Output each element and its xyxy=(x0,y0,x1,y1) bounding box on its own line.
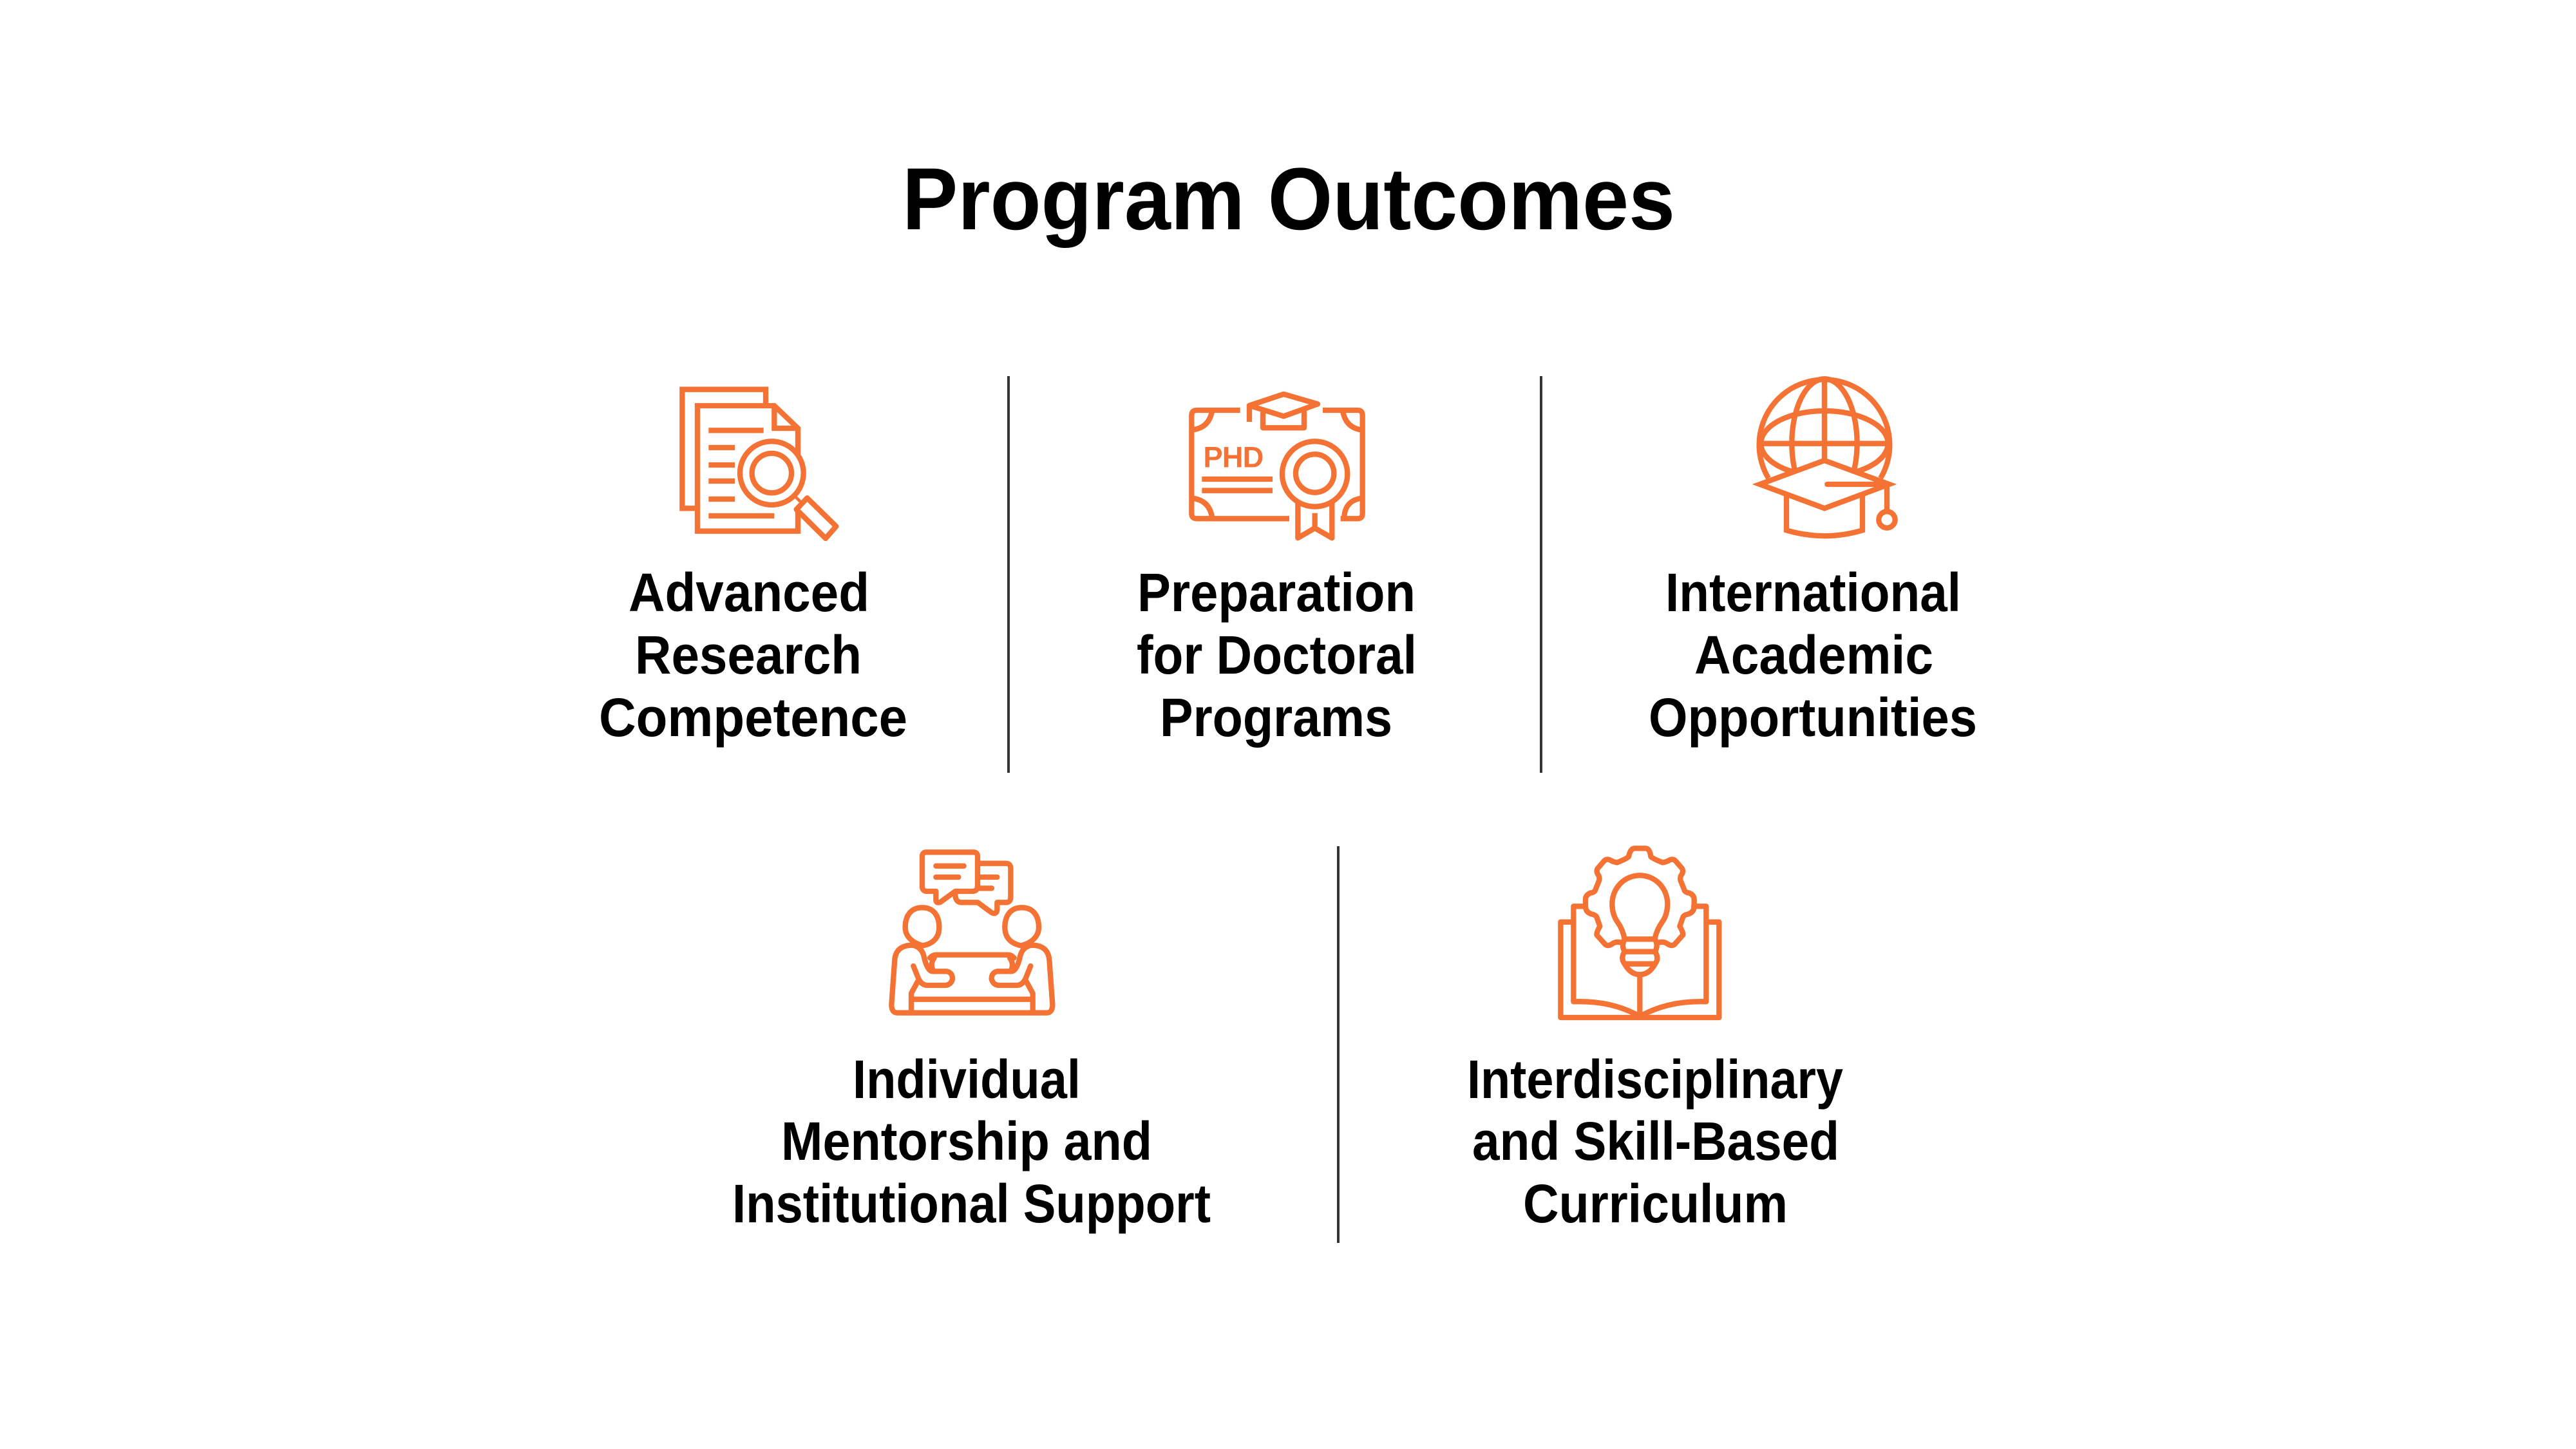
divider: row 2 xyxy=(1337,846,1340,1243)
label: Interdisciplinary and Skill-Based Curriculum: Interdisciplinary xyxy=(1467,1049,1843,1110)
icon: two people talking at a table xyxy=(891,852,1052,1013)
label: International Academic Opportunities: Academic xyxy=(1694,625,1933,685)
icon: globe with graduation cap xyxy=(1759,379,1895,536)
icon: documents with magnifying glass xyxy=(682,390,836,538)
panel: Preparation for Doctoral Programs xyxy=(1137,394,1417,748)
label: Interdisciplinary and Skill-Based Curriculum: and Skill-Based xyxy=(1472,1111,1839,1171)
label: International Academic Opportunities: Opportunities xyxy=(1649,687,1977,748)
label: Advanced Research Competence: Advanced xyxy=(629,562,869,623)
label: Advanced Research Competence xyxy=(599,562,907,748)
label: Interdisciplinary and Skill-Based Curriculum xyxy=(1467,1049,1843,1234)
label: Advanced Research Competence: Research xyxy=(635,625,862,685)
title: Program Outcomes xyxy=(902,150,1675,249)
divider: row 1 left xyxy=(1007,376,1010,773)
label: Interdisciplinary and Skill-Based Curriculum: Curriculum xyxy=(1523,1173,1788,1234)
panel: Advanced Research Competence xyxy=(599,390,907,748)
label: International Academic Opportunities: International xyxy=(1665,562,1961,623)
divider: row 1 right xyxy=(1540,376,1542,773)
label: Preparation for Doctoral Programs: Preparation xyxy=(1137,562,1416,623)
panel: Interdisciplinary and Skill-Based Curriculum xyxy=(1467,848,1843,1234)
label: International Academic Opportunities xyxy=(1649,562,1977,748)
icon: open book with light bulb and gear xyxy=(1560,848,1719,1018)
label: Preparation for Doctoral Programs: for Doctoral xyxy=(1137,625,1417,685)
icon: PhD diploma with cap and seal: PHD xyxy=(1203,441,1264,474)
label: Individual Mentorship and Institutional Support: Individual xyxy=(853,1049,1081,1110)
panel: Individual Mentorship and Institutional Support xyxy=(732,852,1211,1234)
label: Preparation for Doctoral Programs xyxy=(1137,562,1417,748)
icon: PhD diploma with cap and seal xyxy=(1191,394,1363,538)
panel: International Academic Opportunities xyxy=(1649,379,1977,748)
label: Individual Mentorship and Institutional Support: Mentorship and xyxy=(781,1111,1152,1171)
label: Individual Mentorship and Institutional Support xyxy=(732,1049,1211,1234)
label: Individual Mentorship and Institutional Support: Institutional Support xyxy=(732,1173,1211,1234)
label: Preparation for Doctoral Programs: Programs xyxy=(1160,687,1392,748)
label: Advanced Research Competence: Competence xyxy=(599,687,907,748)
